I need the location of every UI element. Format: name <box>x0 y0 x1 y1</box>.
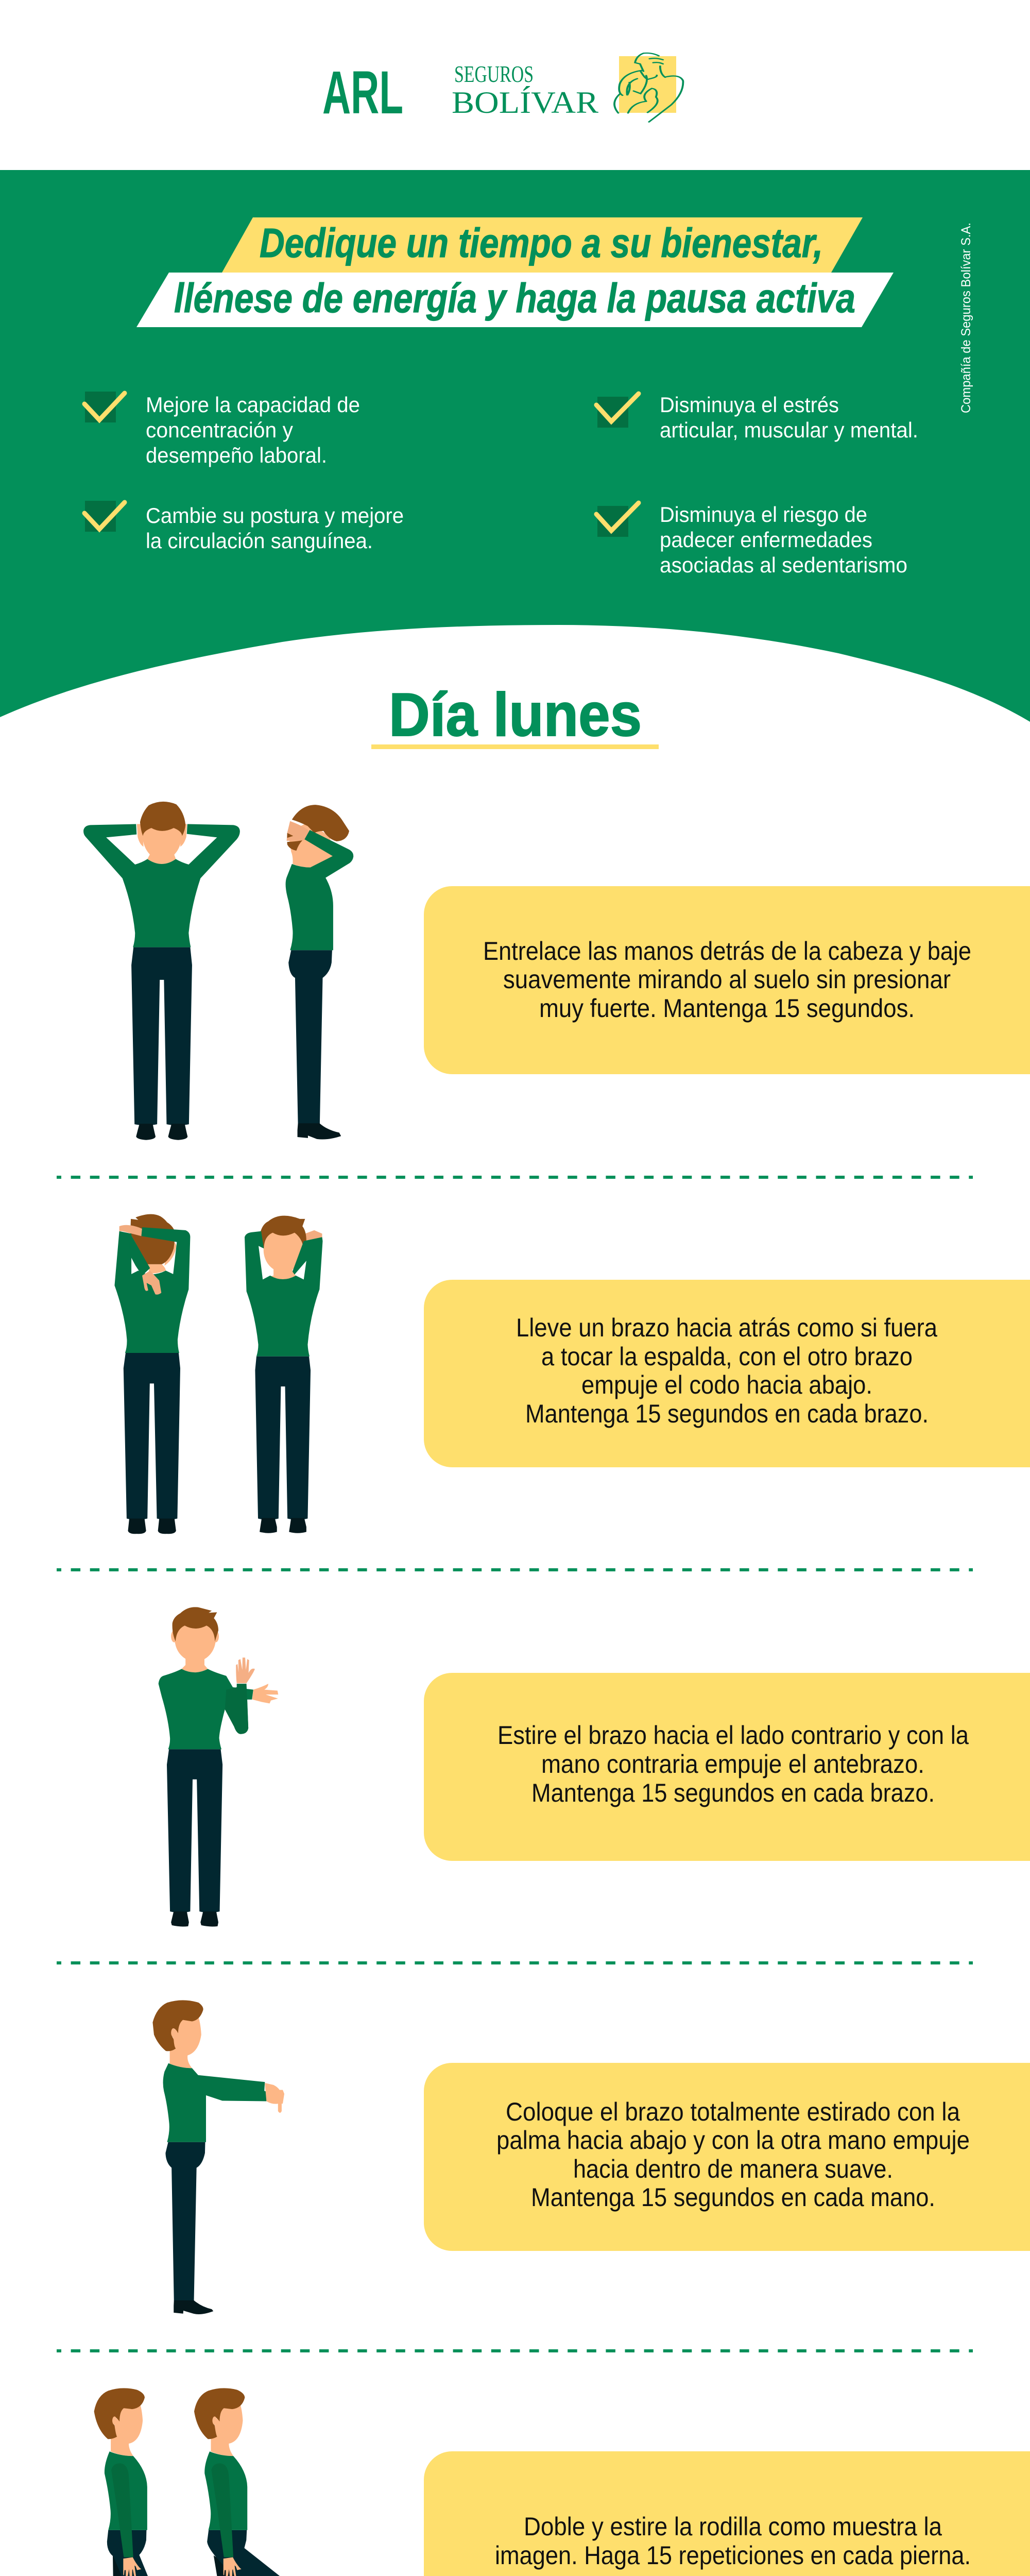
exercise 1 text box: Entrelace las manos detrás de la cabeza y baje <box>483 937 971 965</box>
exercise 5 text box <box>424 2451 1030 2576</box>
exercise 4 text box: hacia dentro de manera suave. <box>573 2155 893 2183</box>
exercise 1 text box <box>424 886 1030 1074</box>
figure: front, hands behind head <box>83 802 240 1140</box>
exercise 3 text box <box>424 1673 1030 1861</box>
exercise 4 text box <box>424 2063 1030 2251</box>
exercise 1 text box: muy fuerte. Mantenga 15 segundos. <box>539 994 915 1023</box>
benefit: capacidad: Mejore la capacidad de <box>146 393 360 417</box>
figure: front, elbow push <box>245 1216 323 1533</box>
benefit: estrés <box>596 393 918 442</box>
heading: Día lunes: Día lunes <box>389 681 642 749</box>
exercise 3 text box: Estire el brazo hacia el lado contrario y con la <box>497 1721 969 1750</box>
exercise 5 text box: Doble y estire la rodilla como muestra la <box>524 2512 942 2541</box>
exercise 2 text box: Mantenga 15 segundos en cada brazo. <box>525 1399 929 1428</box>
benefit: sedentarismo: asociadas al sedentarismo <box>660 553 907 577</box>
benefit: sedentarismo <box>596 502 907 577</box>
panel: green header <box>0 170 1030 722</box>
exercise 4 text box: Coloque el brazo totalmente estirado con la <box>506 2097 960 2126</box>
exercise 5 text box: imagen. Haga 15 repeticiones en cada pierna. <box>495 2541 971 2570</box>
exercise 2 text box: empuje el codo hacia abajo. <box>581 1370 872 1399</box>
exercise 4 text box: palma hacia abajo y con la otra mano empuje <box>496 2126 970 2155</box>
logo: ARL Seguros Bolívar <box>322 53 683 127</box>
exercise 2 text box: Lleve un brazo hacia atrás como si fuera <box>516 1313 937 1342</box>
dividers <box>57 1177 973 2576</box>
benefit: capacidad <box>84 392 360 467</box>
exercise 1 text box: suavemente mirando al suelo sin presionar <box>503 965 951 994</box>
logo: ARL Seguros Bolívar: ARL <box>322 59 403 127</box>
exercise 2 text box <box>424 1280 1030 1467</box>
exercise 3 text box: mano contraria empuje el antebrazo. <box>541 1750 924 1778</box>
exercise 4 text box: Mantenga 15 segundos en cada mano. <box>531 2183 935 2212</box>
logo: ARL Seguros Bolívar: SEGUROS <box>454 61 534 87</box>
figure: side, arms forward <box>152 2000 284 2314</box>
benefit: capacidad: desempeño laboral. <box>146 443 327 467</box>
benefit: estrés: articular, muscular y mental. <box>660 418 918 442</box>
title banner <box>136 217 894 327</box>
title banner: llénese de energía y haga la pausa activa <box>174 275 855 321</box>
benefit: estrés: Disminuya el estrés <box>660 393 839 417</box>
figure: bent knee <box>68 2388 164 2576</box>
figure: front, cross-body arm stretch <box>159 1607 278 1926</box>
exercise 3 text box: Mantenga 15 segundos en cada brazo. <box>531 1778 935 1807</box>
benefit: sedentarismo: padecer enfermedades <box>660 528 872 552</box>
benefit: postura: Cambie su postura y mejore <box>146 503 404 528</box>
figure: side, head lowered <box>286 805 353 1140</box>
title banner: Dedique un tiempo a su bienestar, <box>260 220 823 266</box>
benefit: postura <box>84 501 404 553</box>
benefit: capacidad: concentración y <box>146 418 293 442</box>
benefit: postura: la circulación sanguínea. <box>146 529 373 553</box>
logo: ARL Seguros Bolívar: BOLÍVAR <box>452 86 598 120</box>
benefit: sedentarismo: Disminuya el riesgo de <box>660 502 867 527</box>
exercise 2 text box: a tocar la espalda, con el otro brazo <box>541 1342 913 1371</box>
figure: extended knee <box>194 2388 369 2576</box>
vertical company note: Compañía de Seguros Bolívar S.A. <box>959 223 973 413</box>
figure: back view, elbow push <box>114 1214 190 1534</box>
